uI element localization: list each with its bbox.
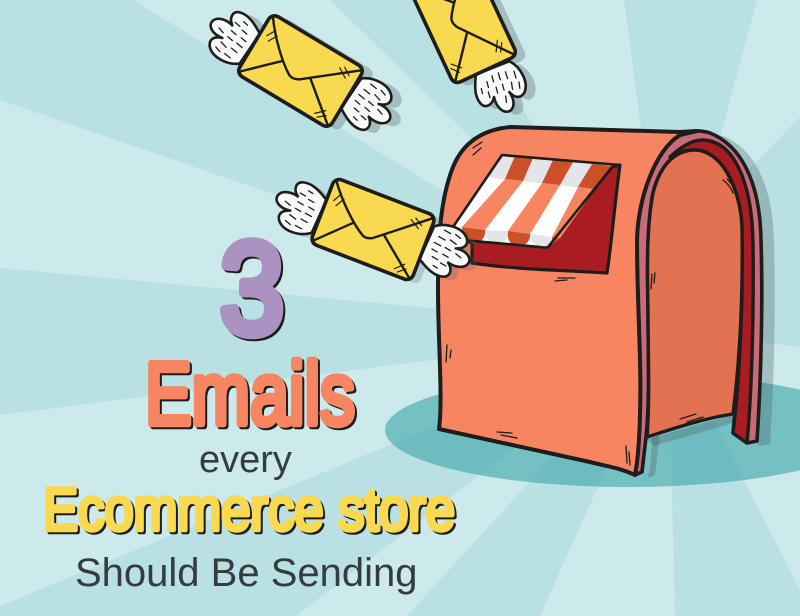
title number: 3 — [220, 215, 284, 361]
mailbox front face — [438, 127, 697, 475]
title — [43, 215, 455, 595]
title line: Should Be Sending: Should Be Sending — [75, 551, 418, 595]
flying envelope: top right — [388, 0, 548, 131]
striped awning — [453, 155, 620, 248]
title word: every: every — [199, 439, 292, 481]
title line: Ecommerce store: Ecommerce store — [43, 476, 455, 543]
mailbox interior — [647, 150, 742, 437]
mailbox red inner band — [670, 140, 753, 443]
mailbox shadow — [647, 134, 775, 478]
mailbox scratch marks — [446, 142, 736, 465]
ground ellipse — [385, 373, 800, 487]
flying envelope: at the slot — [266, 161, 488, 302]
flying envelope: top left — [196, 0, 416, 156]
mailbox — [438, 127, 775, 478]
mailbox arch band — [635, 131, 762, 475]
title word: Emails: Emails — [145, 344, 355, 443]
mail slot — [463, 165, 620, 273]
